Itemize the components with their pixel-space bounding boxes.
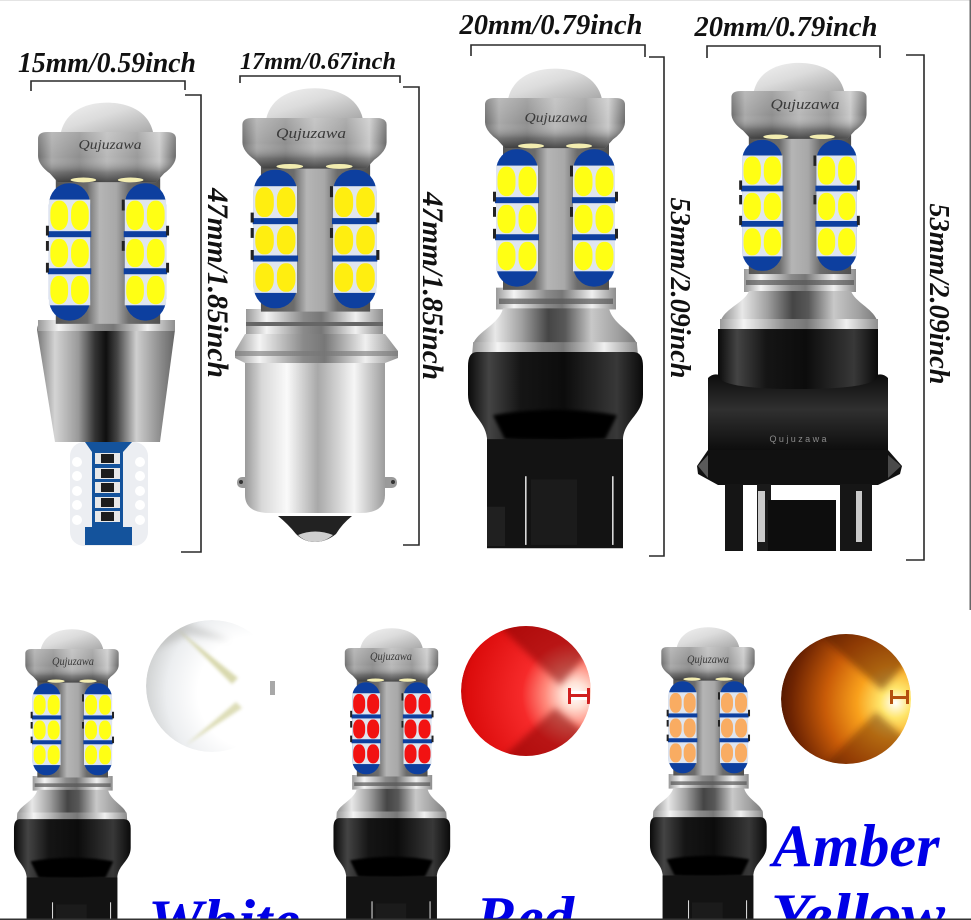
colour sample: amber bulb: Qujuzawa [687,652,729,666]
dimension: bulb 3 width [459,9,645,57]
white plastic wedge base [70,442,148,546]
bulb: BA15S bayonet [235,88,398,542]
colour sample: red bulb [333,628,450,920]
beam: red [461,626,591,756]
LED head [731,63,867,274]
colour sample: white bulb [14,629,131,920]
dimension: bulb 4 width [694,11,880,58]
dimension: bulb 4 width: 20mm/0.79inch [694,11,878,43]
black socket and silver collar [697,269,902,551]
dimension: bulb 4 height [906,55,955,560]
beam: white [146,620,278,752]
colour sample: amber bulb [650,627,767,920]
beam: amber [781,634,911,764]
dimension: bulb 1 height [181,95,234,552]
brand text: Qujuzawa [78,137,142,152]
dimension: bulb 2 height [403,87,449,545]
brand text: Qujuzawa [276,126,346,142]
LED head [485,69,625,290]
socket brand text: Qujuzawa [770,434,826,444]
LED head [242,88,387,312]
dimension: bulb 4 height: 53mm/2.09inch [923,204,955,384]
label: Amber: Amber [768,813,940,879]
colour sample: red bulb: Qujuzawa [370,649,412,663]
colour sample: white bulb: Qujuzawa [52,654,94,668]
dimension: bulb 2 width: 17mm/0.67inch [240,48,396,75]
bulb: T20 7443 wedge [468,69,643,548]
bulb: 3157 wedge [697,63,902,551]
brand text: Qujuzawa [524,110,588,125]
dimension: bulb 2 height: 47mm/1.85inch [416,191,449,380]
dimension: bulb 3 width: 20mm/0.79inch [459,9,642,41]
dimension: bulb 1 height: 47mm/1.85inch [201,187,234,378]
dimension: bulb 1 width: 15mm/0.59inch [18,48,196,79]
bulb: T15 with CANbus base [37,103,176,546]
brand text: Qujuzawa [770,97,840,113]
dimension: bulb 3 height: 53mm/2.09inch [664,198,696,378]
LED head [38,103,176,324]
dimension: bulb 3 height [649,57,696,556]
bayonet metal base [235,309,398,542]
tapered metal body [37,320,175,442]
